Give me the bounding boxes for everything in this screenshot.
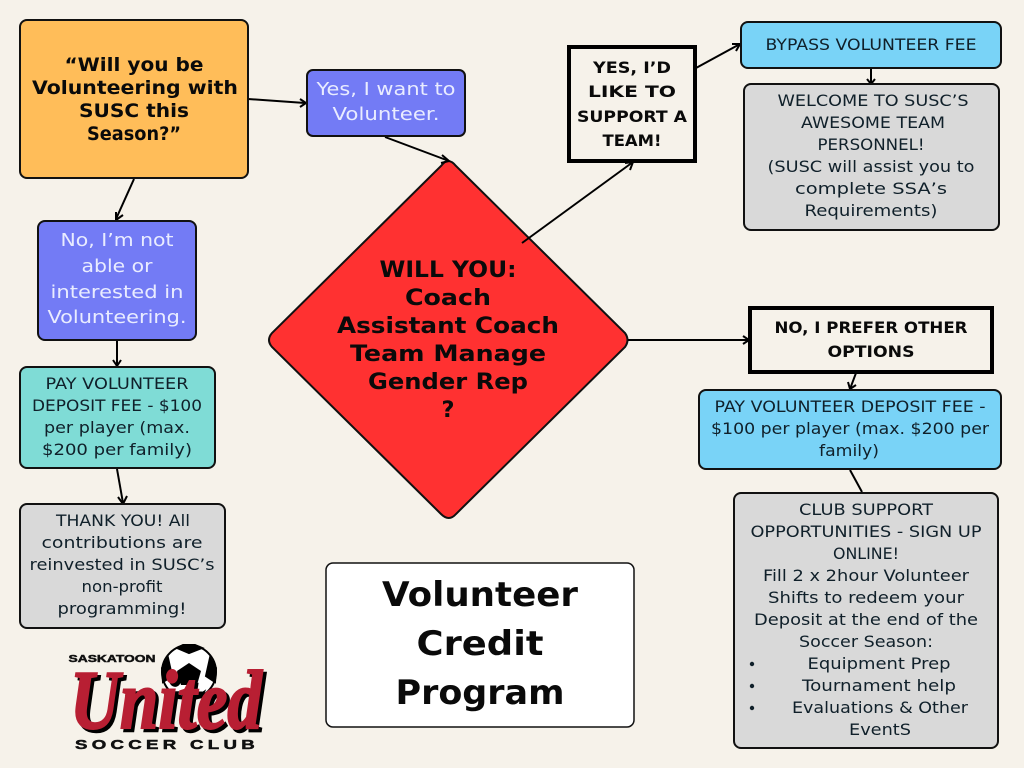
arrow: question to yes [248, 99, 306, 107]
panel: welcome: AWESOME TEAM [801, 113, 945, 132]
panel: no not able: interested in [50, 282, 184, 303]
panel: yes support a team: LIKE TO [588, 82, 676, 101]
panel: volunteering question: SUSC this [79, 100, 189, 122]
panel: will you diamond: Coach [405, 286, 491, 311]
panel: welcome: (SUSC will assist you to [768, 157, 974, 176]
panel: club support: EventS [849, 720, 911, 739]
panel: welcome [744, 84, 999, 230]
arrow: bypass to welcome [867, 68, 875, 84]
title: volunteer credit program: Credit [416, 624, 544, 664]
panel: thank you [20, 504, 225, 628]
panel: thank you: THANK YOU! All [55, 511, 190, 530]
panel: club support: Fill 2 x 2hour Volunteer [763, 566, 969, 585]
panel: club support: Equipment Prep [808, 654, 950, 673]
title: volunteer credit program [326, 563, 634, 727]
arrow: pay deposit to thank you [117, 469, 127, 504]
panel: yes support a team: YES, I’D [592, 58, 671, 77]
panel: yes support a team: TEAM! [602, 131, 662, 150]
panel: thank you: programming! [58, 599, 186, 618]
panel: yes I want to volunteer: Volunteer. [332, 104, 440, 125]
panel: volunteering question: “Will you be [64, 54, 204, 76]
panel: volunteering question [20, 20, 248, 178]
panel: volunteering question: Volunteering with [32, 77, 238, 99]
panel: welcome: PERSONNEL! [818, 135, 924, 154]
panel: thank you: reinvested in SUSC’s [30, 555, 215, 574]
panel: pay volunteer deposit left [20, 367, 215, 468]
panel: will you diamond: WILL YOU: [380, 258, 516, 283]
panel: pay volunteer deposit left: PAY VOLUNTEER [46, 374, 188, 393]
panel: pay volunteer deposit left: per player (max. [44, 418, 190, 437]
panel: thank you: contributions are [42, 533, 202, 552]
panel: pay volunteer deposit left: DEPOSIT FEE - $100 [32, 396, 202, 415]
panel: club support [734, 493, 998, 748]
panel: welcome: WELCOME TO SUSC’S [778, 91, 968, 110]
panel: club support: Deposit at the end of the [754, 610, 978, 629]
arrow: diamond to support a team [522, 162, 633, 243]
panel: will you diamond [269, 161, 628, 518]
panel: no prefer other options: NO, I PREFER OTHER [774, 318, 968, 337]
panel: will you diamond: Gender Rep [368, 370, 528, 395]
panel: pay volunteer deposit left: $200 per family) [42, 440, 192, 459]
logo: Saskatoon United Soccer Club: SOCCER CLUB [75, 737, 259, 752]
panel: will you diamond: ? [442, 398, 454, 423]
panel: club support: CLUB SUPPORT [799, 500, 933, 519]
title: volunteer credit program: Volunteer [382, 575, 578, 615]
panel: pay volunteer deposit right: family) [819, 441, 879, 460]
panel: yes support a team: SUPPORT A [577, 107, 688, 126]
panel: yes support a team [569, 47, 695, 161]
arrow: no to pay deposit [113, 340, 121, 366]
panel: pay volunteer deposit right: PAY VOLUNTEER DEPOSIT FEE - [714, 397, 986, 416]
panel: no prefer other options: OPTIONS [828, 342, 914, 361]
panel: club support: Tournament help [801, 676, 956, 695]
logo: Saskatoon United Soccer Club: United [73, 657, 267, 750]
arrow: support a team to bypass [696, 44, 740, 68]
panel: club support: Shifts to redeem your [768, 588, 964, 607]
icon: soccer ball [162, 645, 216, 699]
panel: welcome: Requirements) [804, 201, 938, 220]
panel: welcome: complete SSA’s [795, 179, 947, 198]
panel: will you diamond: Team Manage [350, 342, 546, 367]
panel: will you diamond: Assistant Coach [337, 314, 559, 339]
arrow: question to no [116, 179, 134, 220]
panel: pay volunteer deposit right [699, 390, 1001, 469]
panel: pay volunteer deposit right: $100 per player (max. $200 per [711, 419, 989, 438]
panel: club support: OPPORTUNITIES - SIGN UP [750, 522, 982, 541]
panel: yes I want to volunteer: Yes, I want to [315, 79, 456, 100]
connector: pay deposit to club support [850, 470, 862, 492]
panel: bypass volunteer fee [741, 22, 1001, 68]
logo: Saskatoon United Soccer Club: United [70, 654, 264, 747]
panel: no not able [38, 221, 196, 340]
panel: club support: Evaluations & Other [792, 698, 968, 717]
panel: thank you: non-profit [82, 577, 162, 596]
arrow: yes to diamond [385, 137, 449, 163]
panel: bypass volunteer fee: BYPASS VOLUNTEER FEE [766, 35, 976, 54]
panel: yes I want to volunteer [307, 70, 465, 136]
panel: club support: Soccer Season: [799, 632, 933, 651]
panel: no not able: No, I’m not [60, 230, 174, 251]
arrow: diamond to other options [628, 336, 749, 344]
title: volunteer credit program: Program [396, 673, 564, 713]
panel: no not able: able or [82, 256, 153, 277]
panel: no not able: Volunteering. [48, 307, 186, 328]
arrow: other options to pay deposit [848, 373, 856, 389]
panel: club support: ONLINE! [833, 544, 899, 563]
logo: Saskatoon United Soccer Club: SASKATOON [68, 653, 156, 665]
panel: no prefer other options [750, 308, 992, 372]
panel: volunteering question: Season?” [87, 123, 181, 145]
